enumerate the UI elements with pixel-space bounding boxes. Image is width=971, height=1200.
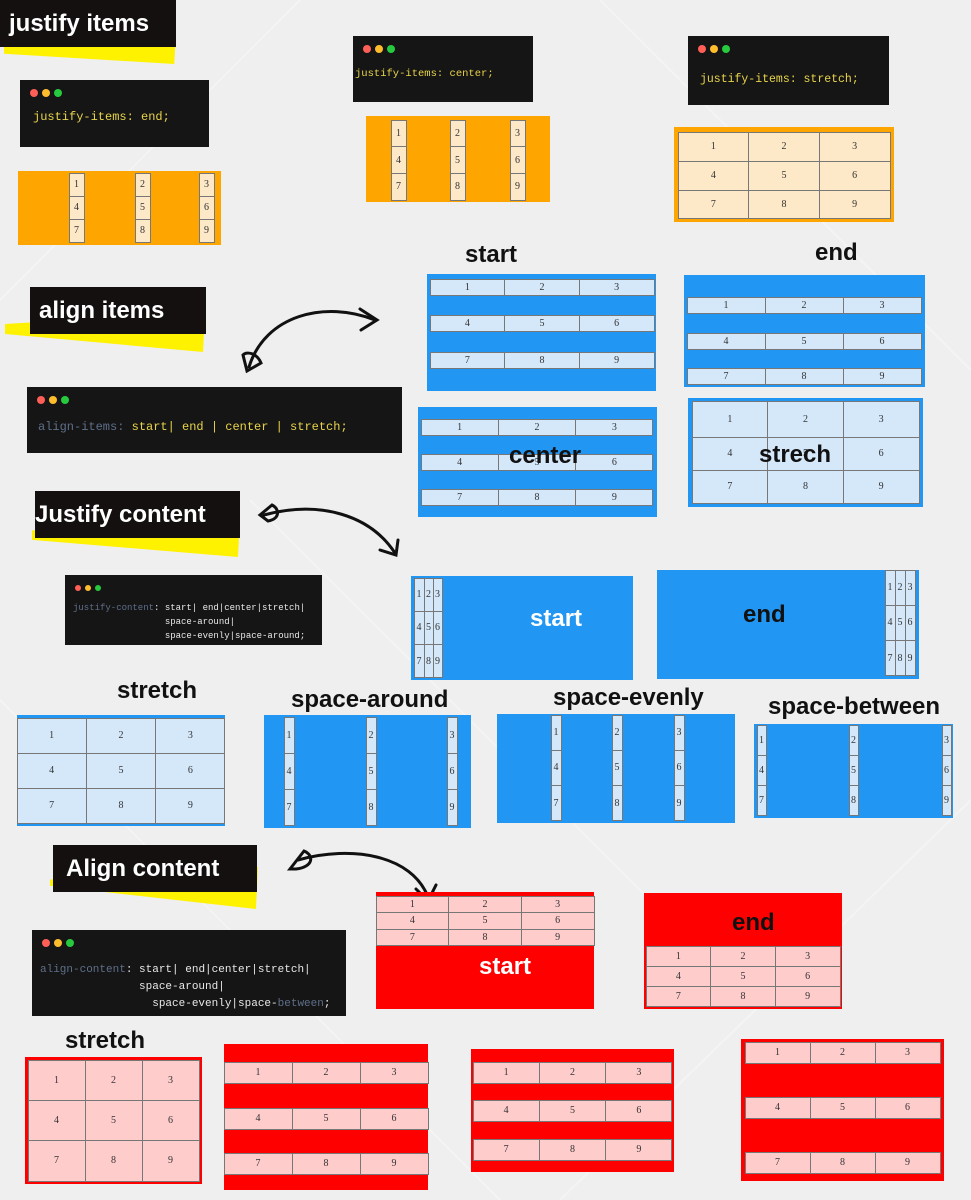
grid: align-content end: 2: [740, 950, 746, 962]
grid: justify-items end: [18, 171, 221, 245]
grid: align-content start: [376, 892, 594, 1009]
grid: align-items center: 3: [612, 422, 617, 432]
grid: justify-content end: 8: [898, 653, 902, 664]
grid: space-between: 2: [851, 735, 856, 746]
grid: justify-items stretch: 5: [782, 170, 786, 181]
grid: justify-content stretch: 1: [49, 730, 54, 741]
label: space-evenly: space-evenly: [553, 684, 704, 711]
grid: space-evenly: [497, 714, 735, 823]
grid: space-around: 5: [368, 766, 374, 777]
grid: align-content start: 6: [555, 915, 560, 926]
grid: space-between: 5: [851, 765, 856, 776]
grid: align-items stretch: [688, 398, 923, 507]
grid: justify-items stretch: 8: [782, 198, 786, 210]
grid: justify-items center: 3: [515, 128, 520, 139]
grid: align-items stretch: 3: [879, 414, 884, 424]
grid: align-items start: 4: [465, 318, 470, 328]
grid: justify-content stretch: 2: [118, 730, 123, 741]
grid: align-items stretch: 9: [879, 481, 884, 492]
grid: space-evenly: 8: [614, 798, 620, 809]
grid: justify-content stretch: 4: [49, 765, 54, 776]
grid: align-content stretch: 9: [168, 1155, 173, 1166]
grid: justify-items center: 7: [396, 181, 401, 192]
grid: space-evenly: 3: [676, 727, 682, 738]
grid: align-content start: 3: [555, 898, 560, 910]
label: start: start: [530, 605, 582, 632]
arrow: align items: [241, 307, 380, 374]
grid: justify-items end: 4: [74, 202, 79, 213]
grid: align-content end: 3: [805, 950, 810, 962]
code: justify-items center: justify-items: center;: [355, 68, 494, 80]
label: start: start: [465, 241, 517, 268]
grid: align-content space-around: [224, 1044, 428, 1190]
code: align-content: align-content: start| end|center|stretch| space-around| space-evenly|space-between;: [40, 964, 330, 1010]
grid: align-content space-between: 7: [775, 1157, 780, 1168]
code: align-content: [32, 930, 346, 1016]
grid: align-content stretch: 7: [54, 1155, 59, 1166]
grid: space-between: 4: [759, 765, 764, 776]
grid: align-content end: 1: [676, 950, 681, 962]
grid: align-content space-around: 4: [256, 1113, 260, 1124]
code: align-items: align-items: start| end | center | stretch;: [38, 420, 348, 434]
code: justify-items end: [20, 80, 209, 147]
code: justify-items stretch: justify-items: stretch;: [700, 73, 859, 86]
grid: align-items start: 7: [465, 354, 470, 366]
grid: justify-items center: 5: [455, 154, 460, 166]
grid: align-content start: 9: [555, 932, 560, 942]
grid: align-items stretch: 2: [803, 414, 808, 424]
grid: justify-items stretch: 3: [852, 141, 857, 152]
grid: align-content start: 8: [482, 932, 488, 942]
grid: align-content stretch: 4: [54, 1114, 59, 1126]
grid: align-items stretch: 1: [727, 414, 732, 424]
grid: justify-items stretch: 6: [852, 170, 857, 181]
arrow: justify content: [258, 503, 400, 557]
grid: align-content space-around: 1: [256, 1067, 260, 1078]
grid: align-content end: [644, 893, 842, 1009]
grid: justify-content start: 8: [426, 656, 431, 667]
grid: align-items center: 5: [534, 456, 539, 468]
grid: align-content space-evenly: 5: [570, 1105, 575, 1116]
grid: align-content start: 1: [410, 898, 415, 910]
grid: space-around: 1: [286, 730, 292, 741]
grid: align-items start: 5: [540, 318, 544, 328]
code: justify-items end: justify-items: end;: [33, 110, 170, 124]
grid: space-evenly: 1: [554, 727, 558, 738]
label: end: end: [815, 239, 858, 266]
grid: justify-content start: 2: [426, 589, 431, 600]
grid: align-items start: 6: [614, 318, 619, 328]
code: justify-items center: [353, 36, 533, 102]
grid: justify-content stretch: 3: [188, 730, 193, 741]
label: stretch: stretch: [65, 1027, 145, 1054]
grid: align-content space-between: [741, 1039, 944, 1181]
code: justify-items stretch: [688, 36, 889, 105]
grid: align-content space-evenly: 1: [504, 1067, 509, 1078]
grid: align-items center: 9: [612, 492, 617, 502]
grid: align-content end: 6: [805, 970, 810, 982]
grid: space-evenly: 6: [676, 762, 682, 773]
grid: align-content space-between: 3: [905, 1047, 910, 1058]
grid: space-around: 2: [368, 730, 374, 741]
grid: space-around: 9: [450, 802, 454, 813]
grid: align-content start: 4: [410, 915, 415, 926]
grid: align-content space-around: 5: [324, 1113, 328, 1124]
grid: justify-content stretch: [17, 715, 225, 826]
label: space-around: space-around: [291, 686, 448, 713]
grid: space-around: 6: [450, 766, 454, 777]
grid: justify-items end: 5: [140, 202, 145, 213]
grid: space-around: 8: [368, 802, 374, 813]
grid: space-around: [264, 715, 471, 828]
grid: align-items end: 6: [880, 336, 884, 346]
grid: align-items center: 6: [612, 456, 617, 468]
grid: align-items start: 3: [614, 282, 619, 292]
code: justify-content: [65, 575, 322, 645]
grid: align-items center: [418, 407, 657, 517]
grid: justify-items end: 1: [74, 179, 79, 190]
grid: justify-content end: 6: [908, 617, 912, 628]
grid: justify-items stretch: 1: [711, 141, 716, 152]
grid: align-content end: 7: [676, 990, 681, 1002]
grid: justify-content end: 1: [888, 582, 892, 593]
grid: align-content space-around: 8: [324, 1158, 328, 1169]
grid: align-items center: 8: [534, 492, 539, 502]
title: justify items: justify items: [9, 10, 149, 36]
grid: justify-content end: 2: [898, 582, 902, 593]
grid: align-content space-evenly: 8: [570, 1144, 575, 1155]
grid: align-content stretch: 3: [168, 1074, 173, 1086]
grid: space-between: 1: [759, 735, 764, 746]
grid: align-items end: 5: [802, 336, 806, 346]
grid: space-evenly: 7: [554, 798, 558, 809]
grid: align-content end: 5: [740, 970, 746, 982]
grid: justify-content end: 5: [898, 617, 902, 628]
grid: justify-content stretch: 8: [118, 800, 123, 811]
grid: justify-content end: [657, 570, 919, 679]
title: Align content: [50, 845, 258, 909]
title: Justify content: Justify content: [35, 500, 206, 528]
grid: align-content space-between: 1: [775, 1047, 780, 1058]
grid: justify-items center: 1: [396, 128, 401, 139]
grid: space-around: 7: [286, 802, 292, 813]
grid: justify-content stretch: 7: [49, 800, 54, 811]
grid: justify-items end: 9: [204, 225, 209, 236]
grid: align-content space-around: 7: [256, 1158, 260, 1169]
grid: justify-content end: 9: [908, 653, 912, 664]
grid: space-between: 6: [944, 765, 949, 776]
grid: justify-content start: 7: [416, 656, 422, 667]
label: stretch: stretch: [117, 677, 197, 704]
grid: align-items stretch: 5: [803, 448, 808, 459]
arrow: align content: [287, 849, 438, 892]
grid: justify-items center: 6: [515, 154, 520, 166]
grid: align-items end: 9: [880, 370, 884, 382]
grid: align-content end: 9: [805, 990, 810, 1002]
grid: justify-content start: 4: [416, 622, 422, 633]
grid: justify-content end: 7: [888, 653, 892, 664]
grid: align-items center: 4: [457, 456, 462, 468]
grid: space-evenly: 5: [614, 762, 620, 773]
grid: justify-content start: 3: [435, 589, 440, 600]
grid: align-items end: 2: [802, 300, 806, 310]
grid: align-content space-around: 6: [392, 1113, 396, 1124]
grid: align-content space-between: 8: [840, 1157, 845, 1168]
grid: justify-items stretch: 9: [852, 198, 857, 210]
grid: justify-items end: 3: [204, 179, 209, 190]
grid: space-evenly: 2: [614, 727, 620, 738]
grid: align-items stretch: 4: [727, 448, 732, 459]
label: end: end: [743, 601, 786, 628]
grid: space-around: 4: [286, 766, 292, 777]
grid: align-content space-evenly: [471, 1049, 674, 1172]
grid: align-content space-between: 5: [840, 1102, 845, 1113]
grid: align-content space-evenly: 4: [504, 1105, 509, 1116]
grid: justify-content stretch: 9: [188, 800, 193, 811]
grid: justify-items center: 2: [455, 128, 460, 139]
grid: align-items start: 8: [540, 354, 544, 366]
grid: align-items center: 1: [457, 422, 462, 432]
grid: space-evenly: 9: [676, 798, 682, 809]
grid: align-items stretch: 6: [879, 448, 884, 459]
title: align items: align items: [39, 296, 164, 324]
grid: justify-items end: 2: [140, 179, 145, 190]
grid: justify-items center: [366, 116, 550, 202]
grid: align-items start: 2: [540, 282, 544, 292]
grid: align-items end: [684, 275, 925, 387]
label: center: center: [509, 442, 581, 469]
grid: space-between: 9: [944, 795, 949, 806]
grid: align-content start: 2: [482, 898, 488, 910]
grid: justify-items stretch: 4: [711, 170, 716, 181]
grid: align-content space-evenly: 7: [504, 1144, 509, 1155]
grid: align-content space-between: 2: [840, 1047, 845, 1058]
grid: align-content space-around: 9: [392, 1158, 396, 1169]
title: align items: [5, 287, 206, 352]
grid: justify-content start: 9: [435, 656, 440, 667]
grid: align-content space-evenly: 2: [570, 1067, 575, 1078]
grid: justify-items end: 8: [140, 225, 145, 236]
grid: align-content stretch: 5: [111, 1114, 116, 1126]
grid: align-content stretch: [25, 1057, 202, 1184]
grid: align-content start: 7: [410, 932, 415, 942]
grid: justify-items end: 7: [74, 225, 79, 236]
grid: justify-items stretch: 7: [711, 198, 716, 210]
grid: align-content end: 4: [676, 970, 681, 982]
code: align-items: [27, 387, 402, 453]
grid: align-items center: 2: [534, 422, 539, 432]
grid: align-content space-evenly: 9: [636, 1144, 641, 1155]
grid: align-content stretch: 1: [54, 1074, 59, 1086]
grid: align-items end: 7: [724, 370, 728, 382]
grid: align-items stretch: 7: [727, 481, 732, 492]
grid: align-content space-between: 9: [905, 1157, 910, 1168]
label: end: end: [732, 909, 775, 936]
grid: justify-content stretch: 6: [188, 765, 193, 776]
grid: align-content end: 8: [740, 990, 746, 1002]
label: space-between: space-between: [768, 693, 940, 720]
grid: align-content space-around: 2: [324, 1067, 328, 1078]
grid: align-content space-evenly: 3: [636, 1067, 641, 1078]
grid: align-items start: [427, 274, 656, 391]
grid: align-content stretch: 2: [111, 1074, 116, 1086]
grid: space-between: 3: [944, 735, 949, 746]
grid: align-content space-around: 3: [392, 1067, 396, 1078]
grid: justify-items stretch: [674, 127, 894, 222]
grid: justify-content stretch: 5: [118, 765, 123, 776]
grid: space-evenly: 4: [554, 762, 558, 773]
grid: align-content space-evenly: 6: [636, 1105, 641, 1116]
grid: align-items start: 1: [465, 282, 470, 292]
grid: space-around: 3: [450, 730, 454, 741]
grid: align-content stretch: 8: [111, 1155, 116, 1166]
grid: justify-items end: 6: [204, 202, 209, 213]
title: justify items: [0, 0, 176, 64]
grid: justify-content start: [411, 576, 633, 680]
grid: justify-items center: 9: [515, 181, 520, 192]
label: start: start: [479, 953, 531, 980]
grid: align-items center: 7: [457, 492, 462, 502]
grid: align-items end: 8: [802, 370, 806, 382]
grid: justify-content end: 3: [908, 582, 912, 593]
grid: align-items end: 4: [724, 336, 728, 346]
grid: align-content space-between: 4: [775, 1102, 780, 1113]
grid: align-items end: 3: [880, 300, 884, 310]
grid: align-content space-between: 6: [905, 1102, 910, 1113]
grid: justify-items stretch: 2: [782, 141, 786, 152]
grid: justify-content start: 6: [435, 622, 440, 633]
grid: justify-content end: 4: [888, 617, 892, 628]
title: Justify content: [32, 491, 240, 557]
grid: space-between: [754, 724, 953, 818]
grid: justify-content start: 5: [426, 622, 431, 633]
title: Align content: Align content: [66, 854, 219, 882]
grid: align-items stretch: 8: [803, 481, 808, 492]
code: justify-content: justify-content: start| end|center|stretch| space-around| space-evenly|space-around;: [73, 603, 305, 641]
grid: justify-items center: 4: [396, 154, 401, 166]
grid: align-content start: 5: [482, 915, 488, 926]
grid: justify-items center: 8: [455, 181, 460, 192]
grid: align-items end: 1: [724, 300, 728, 310]
grid: space-between: 8: [851, 795, 856, 806]
grid: space-between: 7: [759, 795, 764, 806]
grid: align-content stretch: 6: [168, 1114, 173, 1126]
grid: justify-content start: 1: [416, 589, 422, 600]
label: strech: strech: [759, 441, 831, 468]
grid: align-items start: 9: [614, 354, 619, 366]
